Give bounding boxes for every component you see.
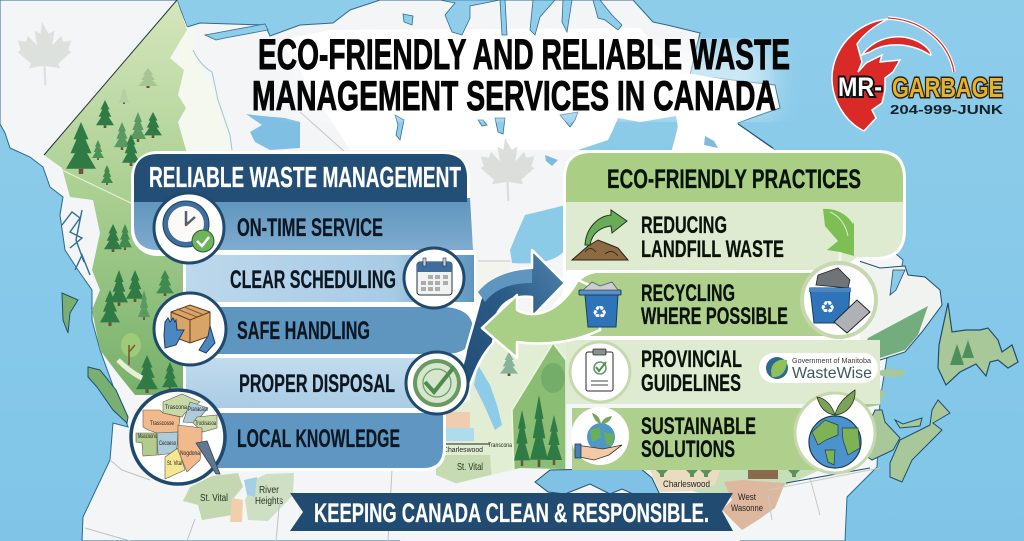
map: alberta pale strip	[177, 2, 230, 155]
map: Great Lakes and southern Ontario: West	[738, 492, 756, 503]
icon: globe with sprout	[795, 390, 875, 473]
panel header: reliable	[134, 154, 467, 202]
label: proper disposal: PROPER DISPOSAL	[239, 370, 395, 398]
title	[252, 31, 790, 119]
row: safe handling background	[186, 307, 473, 354]
panel body: reducing landfill	[566, 200, 903, 270]
map: province lines bottom	[85, 460, 606, 541]
row: clear scheduling background	[186, 255, 474, 302]
logo: Mr. Garbage	[832, 18, 1004, 131]
row: proper disposal background	[186, 358, 440, 408]
label: reducing landfill waste: REDUCING	[641, 212, 727, 239]
icon: recycling circle	[802, 263, 876, 337]
panel: eco-friendly practices: GUIDELINES	[641, 370, 741, 397]
footer ribbon	[290, 493, 733, 531]
footer ribbon: KEEPING CANADA CLEAN & RESPONSIBLE.	[314, 498, 709, 528]
arrow: blue to eco panel	[440, 250, 565, 412]
map: central corridor between panels: Charleswood	[443, 447, 483, 454]
panel: eco-friendly practices: WHERE POSSIBLE	[641, 303, 788, 330]
map: central corridor between panels	[436, 205, 566, 485]
map: maple leaf centre	[481, 138, 534, 201]
icon: neighbourhood map: Trocksasoa	[195, 421, 216, 427]
panel: eco-friendly practices: LANDFILL WASTE	[641, 236, 784, 263]
title glow	[300, 45, 770, 115]
label: on-time service: ON-TIME SERVICE	[237, 214, 383, 242]
panel: eco-friendly practices	[540, 150, 906, 470]
map: maple leaf top left	[18, 22, 71, 85]
map: northern white region	[280, 28, 775, 150]
label: provincial guidelines: PROVINCIAL	[641, 346, 742, 373]
map: coastal fjords	[62, 210, 90, 275]
icon: recycling bin: ♻	[592, 303, 607, 323]
icon: clock	[154, 193, 224, 263]
label: clear scheduling: CLEAR SCHEDULING	[230, 266, 396, 294]
label: sustainable solutions: SUSTAINABLE	[641, 413, 756, 440]
panel: reliable waste management	[131, 151, 476, 471]
map: Newfoundland	[938, 303, 1018, 385]
logo: Mr. Garbage: 204-999-JUNK	[890, 102, 1004, 117]
label: recycling where possible: RECYCLING	[641, 280, 735, 307]
map: Hudson Bay	[578, 116, 678, 150]
arrow: green to reliable panel	[482, 280, 600, 358]
map: arctic channels	[205, 0, 622, 140]
map: province line	[300, 112, 345, 152]
icon: neighbourhood map	[131, 390, 225, 484]
logo: WasteWise: Government of Manitoba	[792, 358, 871, 365]
map: Winnipeg neighbourhoods below left panel: Heights	[255, 495, 283, 507]
icon: hand holding globe	[571, 407, 629, 465]
row: on-time service background	[134, 198, 473, 250]
icon: calendar	[404, 248, 464, 308]
icon: green leaf arrow	[823, 209, 854, 270]
icon: neighbourhood map: Trasscosse	[150, 421, 175, 427]
row: local knowledge background	[186, 413, 443, 468]
logo: WasteWise	[759, 353, 878, 383]
icon: neighbourhood map: St. Vital	[167, 461, 182, 467]
map: central corridor between panels: St. Vital	[457, 461, 483, 473]
map: northeast land	[672, 116, 775, 150]
icon: box and gloves	[154, 293, 226, 365]
map: Winnipeg neighbourhoods below left panel	[183, 473, 294, 522]
panel: eco-friendly practices: SOLUTIONS	[641, 436, 735, 463]
panel header: eco-friendly	[566, 153, 903, 202]
title: MANAGEMENT SERVICES IN CANADA	[252, 72, 776, 119]
icon: recycling circle: ♻	[820, 298, 835, 318]
row: recycling background	[540, 270, 840, 340]
map: Great Lakes and southern Ontario	[400, 468, 880, 541]
icon: neighbourhood map: Pranacass	[188, 407, 208, 413]
icon: clipboard	[570, 342, 630, 402]
icon: neighbourhood map: Nogdona	[180, 451, 201, 457]
row: sustainable background	[572, 408, 825, 470]
map: Great Slave lake	[246, 114, 300, 150]
heading: eco-friendly practices: ECO-FRIENDLY PRACTICES	[607, 164, 861, 194]
icon: neighbourhood map: Mascoono	[138, 434, 157, 440]
map: Maritimes	[855, 369, 950, 482]
map: Great Lakes and southern Ontario: Charleswood	[663, 479, 710, 490]
map: Winnipeg neighbourhoods below left panel: St. Vital	[200, 492, 228, 504]
heading: reliable waste management: RELIABLE WASTE MANAGEMENT	[149, 162, 461, 194]
label: local knowledge: LOCAL KNOWLEDGE	[237, 425, 400, 453]
icon: landfill arrow	[572, 210, 628, 260]
map: northern lake by panel	[545, 155, 558, 166]
icon: neighbourhood map: Trascona	[165, 405, 188, 411]
map: Great Lakes and southern Ontario: Wasonne	[731, 503, 763, 514]
logo: WasteWise: WasteWise	[792, 365, 872, 382]
map: British Columbia forest	[44, 0, 187, 395]
icon: green check seal	[406, 352, 468, 414]
map: Winnipeg neighbourhoods below left panel: River	[259, 484, 279, 496]
map: Quebec and Labrador	[845, 260, 942, 360]
map: lake	[704, 136, 718, 148]
row: provincial background	[566, 340, 880, 404]
icon: recycling bin	[579, 282, 621, 327]
icon: pen marker	[196, 441, 220, 474]
map: Haida Gwaii	[62, 293, 78, 333]
map: Vancouver Island	[88, 367, 128, 423]
icon: neighbourhood map: Cecoeso	[159, 441, 176, 447]
label: safe handling: SAFE HANDLING	[237, 317, 370, 345]
map: central corridor between panels: Transcona	[488, 443, 513, 449]
logo: Mr. Garbage: MR-	[838, 72, 882, 102]
